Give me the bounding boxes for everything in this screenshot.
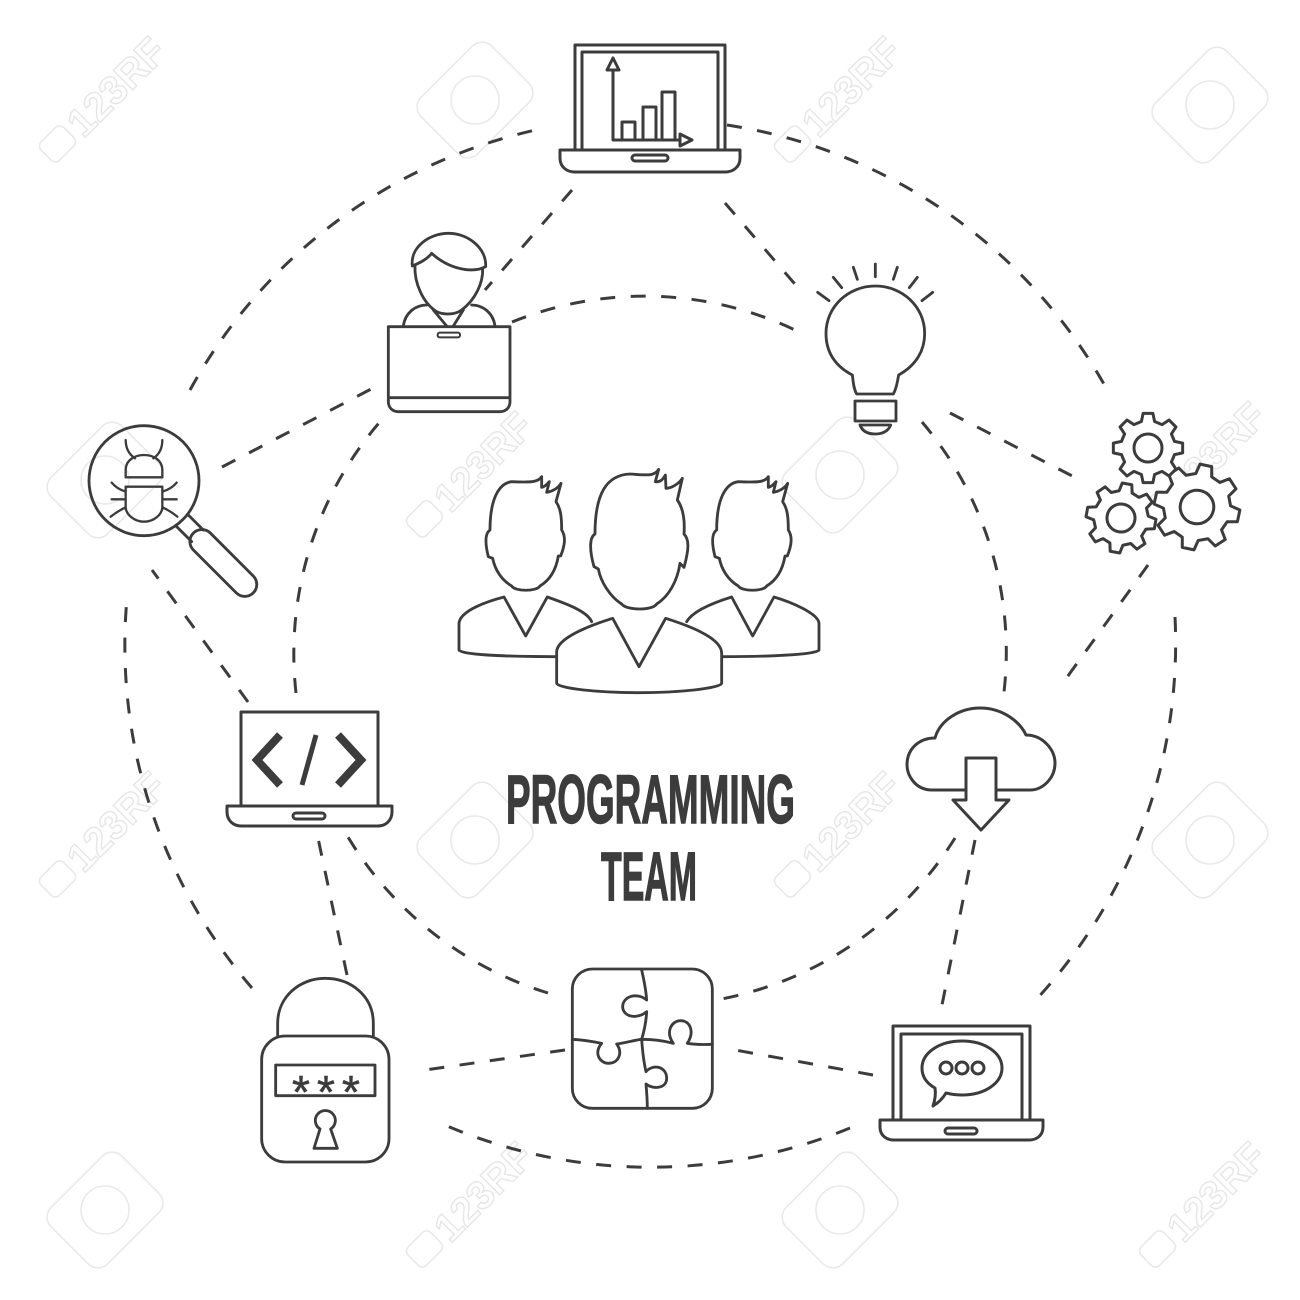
icon: team of three people [459,469,819,693]
password asterisks: *** [292,1066,360,1118]
icon: laptop with code brackets [227,712,392,826]
title: TEAM [601,838,697,915]
watermark pattern: 123RF [794,29,910,145]
icon: password padlock [262,978,389,1162]
icon: cloud download [907,708,1055,830]
icon: developer at laptop [388,233,510,412]
watermark pattern: 123RF [59,764,175,880]
icon: laptop with bar chart [560,45,740,172]
watermark pattern: 123RF [1159,1134,1275,1250]
outer dashed ring [125,125,1176,1167]
watermark pattern: 123RF [426,1134,542,1250]
icon: bug under magnifying glass [89,426,262,601]
title: PROGRAMMING [506,761,795,838]
watermark pattern: 123RF [59,29,175,145]
icon: light bulb [818,264,933,434]
dashed connectors between icons [152,190,1148,1075]
watermark pattern: 123RF [1159,394,1275,510]
watermark pattern: 123RF [794,764,910,880]
icon: three gears [1081,413,1247,558]
inner dashed ring [294,296,1006,1000]
title [506,761,795,915]
icon: jigsaw puzzle [572,969,712,1108]
watermark pattern: 123RF [426,404,542,520]
icon: laptop with chat bubble [880,1026,1043,1140]
